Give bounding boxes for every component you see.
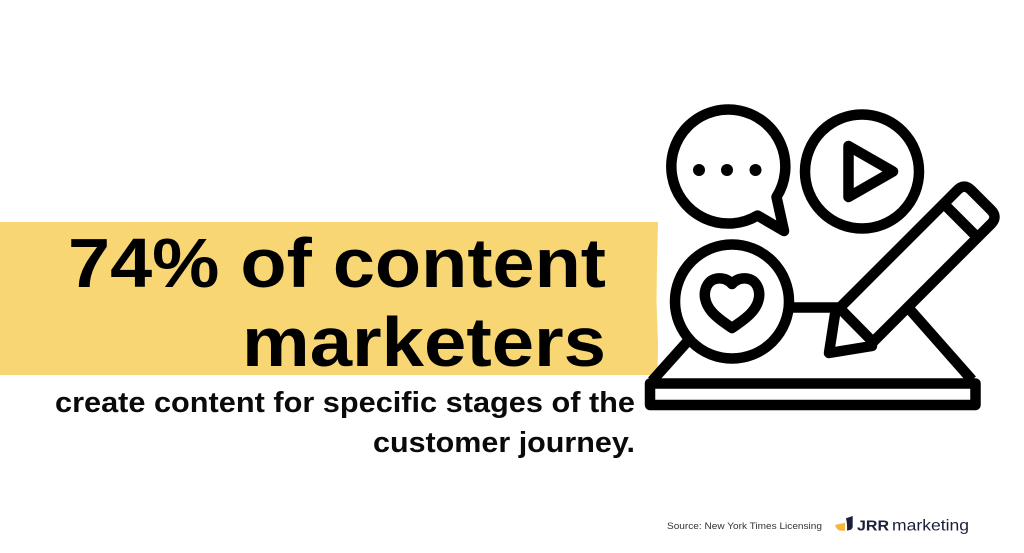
- text block: supporting statement: create content for specific stages of the: [55, 387, 635, 419]
- icon: heart in circle: [675, 244, 789, 358]
- heading: 74% of content marketers: marketers: [242, 303, 606, 381]
- text block: supporting statement: customer journey.: [373, 427, 635, 459]
- icon: tablet base: [650, 304, 976, 405]
- logo: JRR marketing: [835, 516, 969, 535]
- heading: 74% of content marketers: 74% of content: [68, 224, 606, 302]
- icon: content creation illustration: [650, 110, 994, 405]
- icon: pencil: [829, 187, 994, 353]
- panel: yellow highlight band: [0, 222, 658, 375]
- icon: play button: [805, 114, 919, 228]
- logo mark: [835, 516, 853, 531]
- logo wordmark: JRR: [857, 518, 889, 535]
- icon: speech bubble with dots: [671, 110, 785, 231]
- logo wordmark: marketing: [892, 518, 969, 535]
- text block: supporting statement: [55, 387, 635, 459]
- heading: 74% of content marketers: [68, 224, 606, 381]
- source credit: Source: New York Times Licensing: [667, 521, 822, 532]
